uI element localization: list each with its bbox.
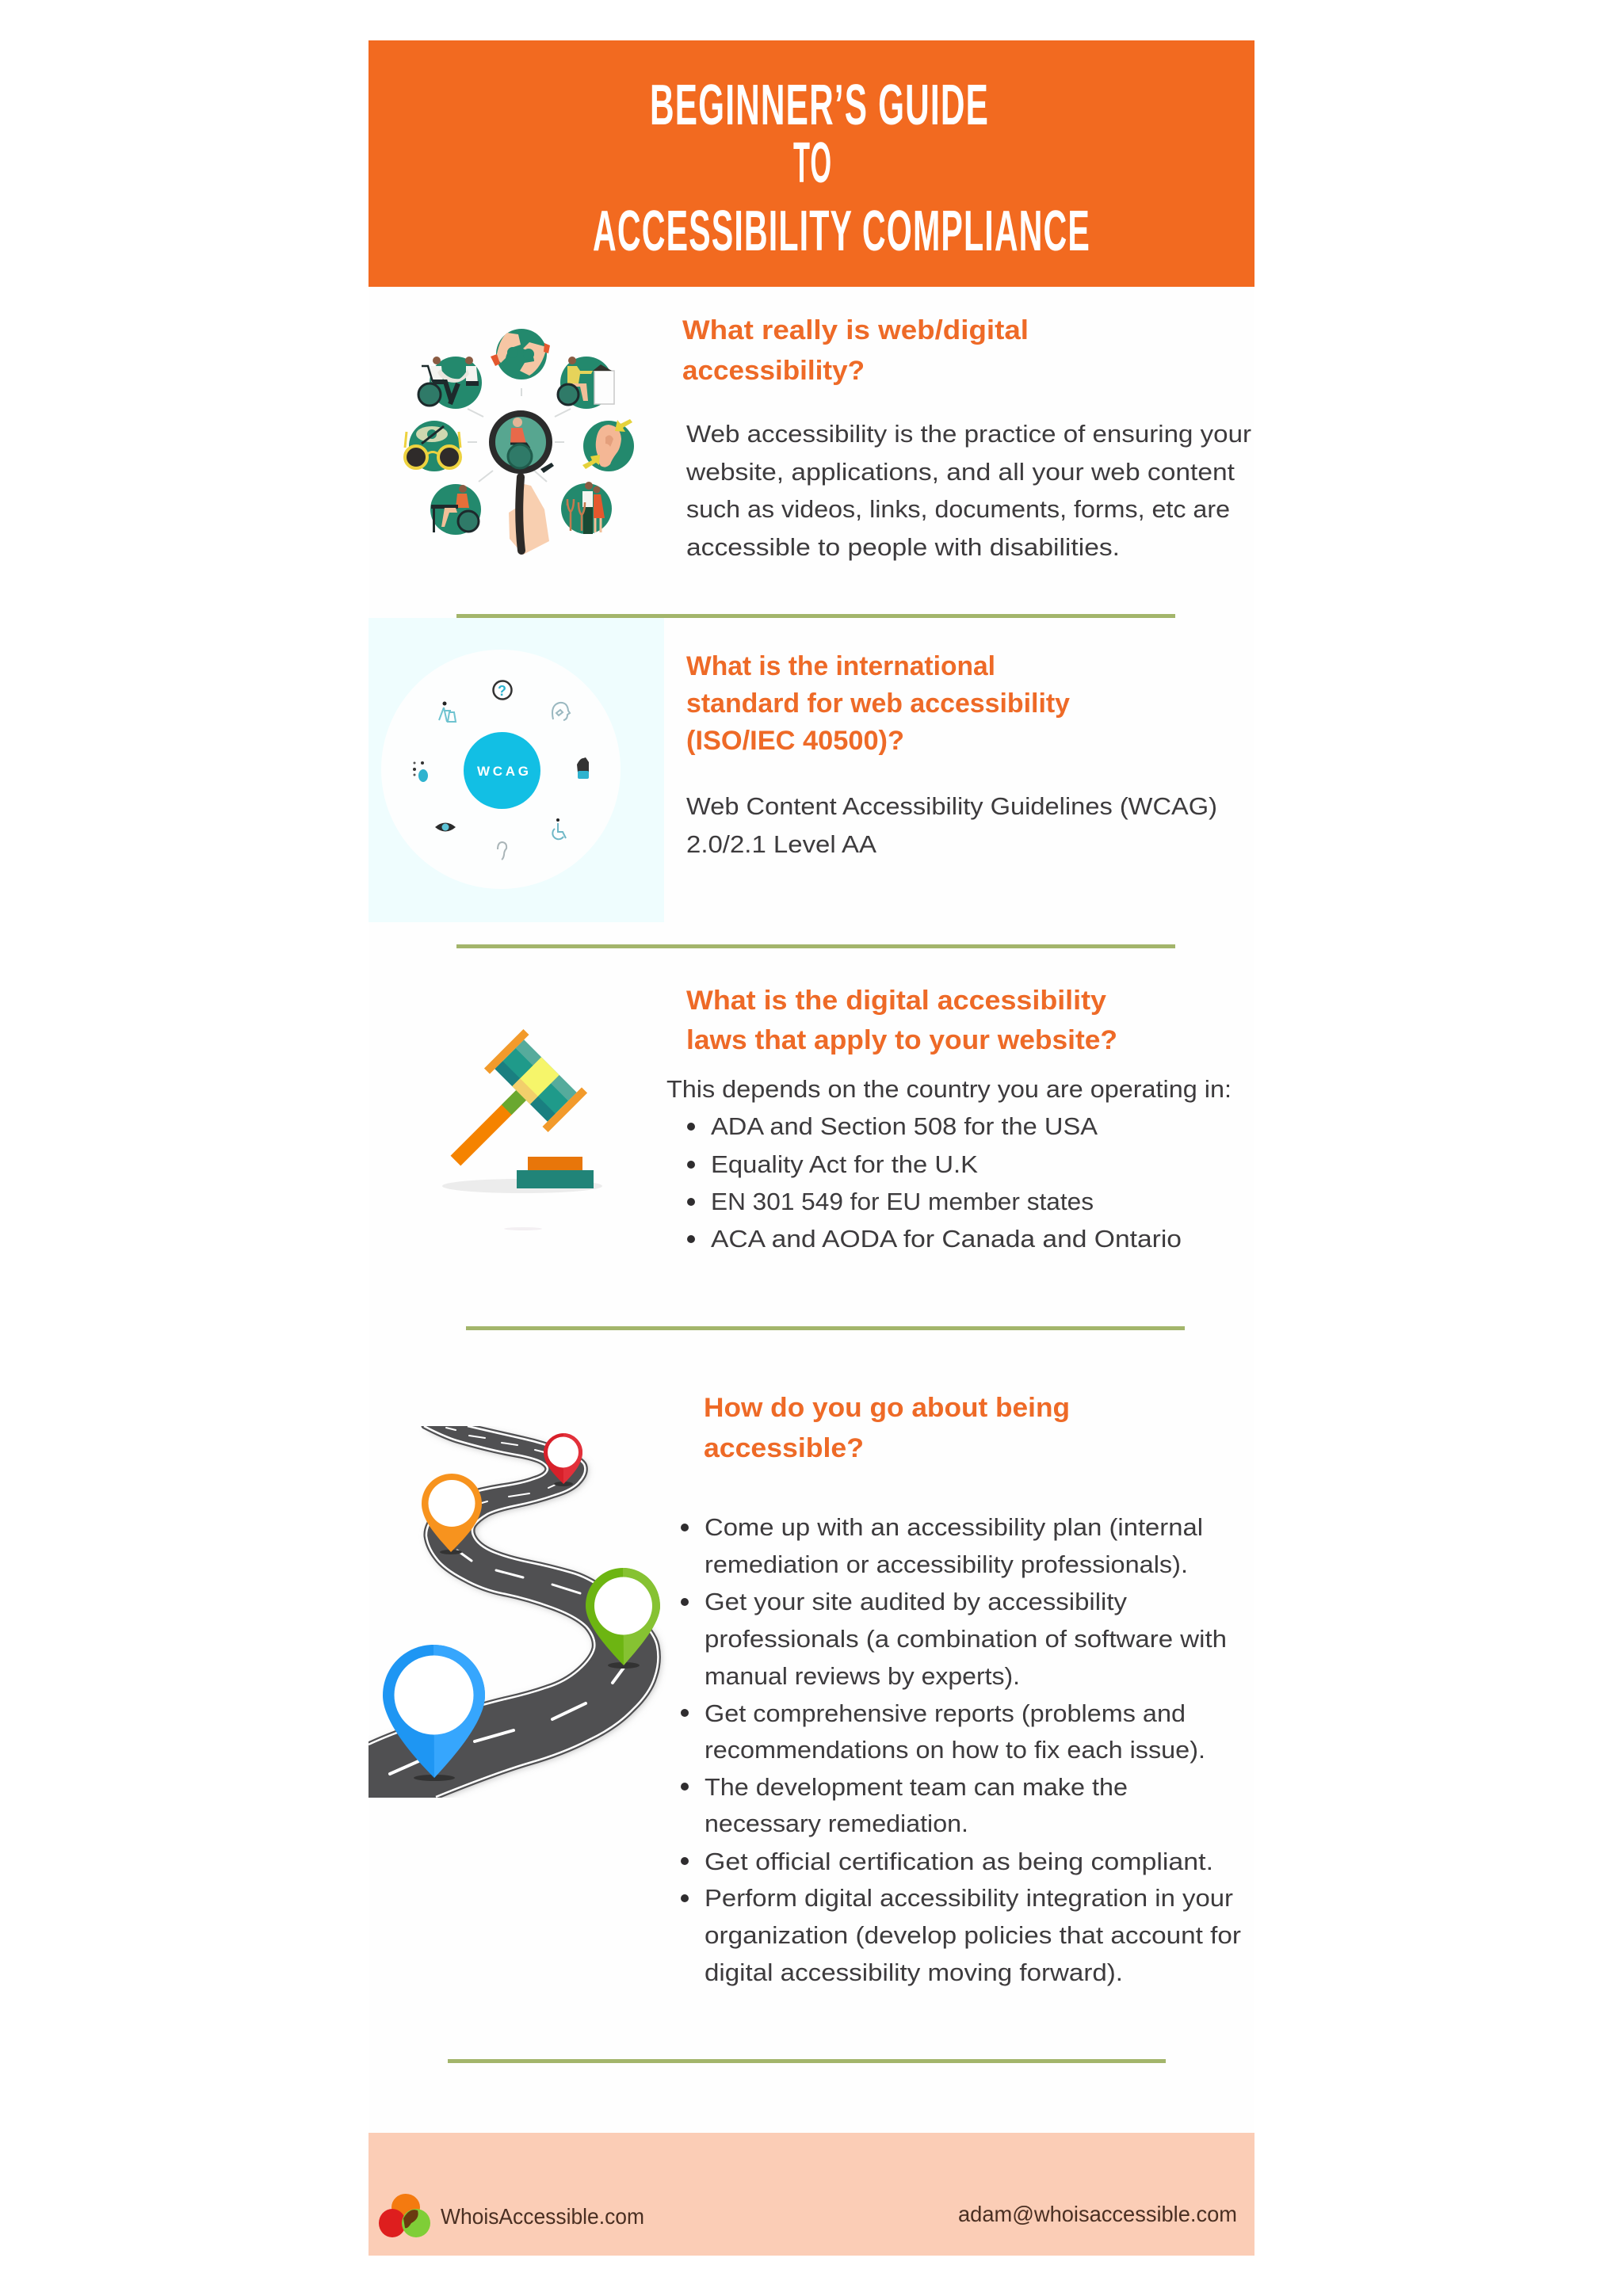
- title: TO: [793, 132, 832, 195]
- email: adam@whoisaccessible.com: [958, 2202, 1237, 2226]
- body text: [685, 420, 1251, 561]
- ear: [582, 419, 632, 469]
- bullet list: steps: Get official certification as being compliant.: [705, 1848, 1213, 1875]
- icon: question mark: [493, 681, 512, 699]
- heading: standard for web accessibility: [686, 688, 1070, 719]
- illustration: gavel: [424, 1029, 602, 1230]
- pin: red: [544, 1433, 582, 1486]
- icon: walker: [439, 702, 456, 722]
- website: WhoisAccessible.com: [441, 2204, 644, 2229]
- pin: orange: [422, 1474, 482, 1554]
- bullet list: laws: ADA and Section 508 for the USA: [711, 1112, 1098, 1140]
- sign language hands: [496, 333, 521, 363]
- heading: (ISO/IEC 40500)?: [686, 726, 904, 756]
- bullet list: steps: [681, 1513, 1241, 1986]
- bullet list: steps: professionals (a combination of software with: [705, 1625, 1227, 1653]
- footer band: [369, 2133, 1254, 2256]
- heading: What is the international: [686, 651, 995, 681]
- title: BEGINNER’S GUIDE: [650, 74, 989, 137]
- title: [593, 74, 1090, 263]
- heading: [682, 315, 1029, 386]
- bullet list: laws: Equality Act for the U.K: [711, 1150, 978, 1178]
- icon: ear: [498, 842, 506, 860]
- heading: accessibility?: [682, 356, 865, 386]
- bullet list: steps: Get comprehensive reports (problems and: [705, 1699, 1186, 1727]
- logo: [379, 2194, 430, 2237]
- body text: Web Content Accessibility Guidelines (WCAG): [686, 792, 1217, 820]
- panel: what is web accessibility: [405, 315, 1251, 561]
- hand and handle: [509, 483, 549, 555]
- podium figure: [558, 357, 614, 405]
- desk figure: [431, 485, 479, 532]
- intro text: This depends on the country you are operating in:: [666, 1075, 1232, 1103]
- yellow glasses: [405, 426, 460, 468]
- heading: What is the digital accessibility: [686, 986, 1106, 1016]
- heading: accessible?: [704, 1433, 864, 1463]
- bullet list: steps: Come up with an accessibility plan (internal: [705, 1513, 1203, 1541]
- bullet list: laws: EN 301 549 for EU member states: [711, 1188, 1094, 1215]
- bullet list: steps: necessary remediation.: [705, 1810, 968, 1837]
- bullet list: steps: Get your site audited by accessibility: [705, 1588, 1128, 1615]
- body text: accessible to people with disabilities.: [686, 533, 1120, 561]
- WCAG illustration: [369, 618, 664, 922]
- illustration: winding road with pins: [369, 1426, 660, 1799]
- panel: international standard: [369, 618, 1217, 922]
- magnifier: [492, 414, 554, 473]
- bullet list: steps: organization (develop policies that account for: [705, 1921, 1241, 1949]
- icon: hand: [577, 757, 589, 779]
- bullet list: steps: remediation or accessibility professionals).: [705, 1550, 1188, 1578]
- bullet list: steps: digital accessibility moving forward).: [705, 1958, 1123, 1986]
- heading: laws that apply to your website?: [686, 1025, 1117, 1055]
- heading: How do you go about being: [704, 1393, 1070, 1423]
- body text: Web accessibility is the practice of ensuring your: [686, 420, 1251, 448]
- heading: [704, 1393, 1070, 1463]
- panel: digital accessibility laws: [424, 986, 1232, 1253]
- WCAG badge: WCAG: [477, 764, 529, 779]
- illustration: accessibility circle with magnifier: [405, 329, 634, 555]
- walking couple with crutches: [567, 482, 605, 534]
- heading: What really is web/digital: [682, 315, 1029, 345]
- title: ACCESSIBILITY COMPLIANCE: [593, 200, 1090, 263]
- body text: website, applications, and all your web content: [685, 458, 1235, 486]
- heading: [686, 986, 1117, 1055]
- bullet list: steps: The development team can make the: [705, 1773, 1128, 1801]
- bullet list: steps: recommendations on how to fix each issue).: [705, 1736, 1205, 1764]
- icon: eye: [435, 822, 456, 832]
- pin: green: [586, 1568, 660, 1669]
- body text: such as videos, links, documents, forms, etc are: [686, 495, 1230, 523]
- heading: [686, 651, 1070, 756]
- body text: 2.0/2.1 Level AA: [686, 830, 876, 858]
- icon: wheelchair: [552, 818, 566, 839]
- panel: how to be accessible: [369, 1393, 1241, 1986]
- header banner: [369, 40, 1254, 287]
- bullet list: steps: manual reviews by experts).: [705, 1662, 1020, 1690]
- wheelchair handshake figures: [418, 357, 479, 406]
- bullet list: laws: [687, 1112, 1182, 1253]
- bullet list: steps: Perform digital accessibility integration in your: [705, 1884, 1233, 1912]
- bullet list: laws: ACA and AODA for Canada and Ontario: [711, 1225, 1182, 1253]
- WCAG badge: [464, 732, 540, 809]
- arrows between circles: [468, 388, 571, 482]
- pin: blue: [383, 1645, 485, 1781]
- icon: head: [552, 703, 570, 720]
- icon: braille hand: [413, 761, 428, 782]
- body text: [686, 792, 1217, 858]
- icon: question mark: ?: [498, 683, 506, 699]
